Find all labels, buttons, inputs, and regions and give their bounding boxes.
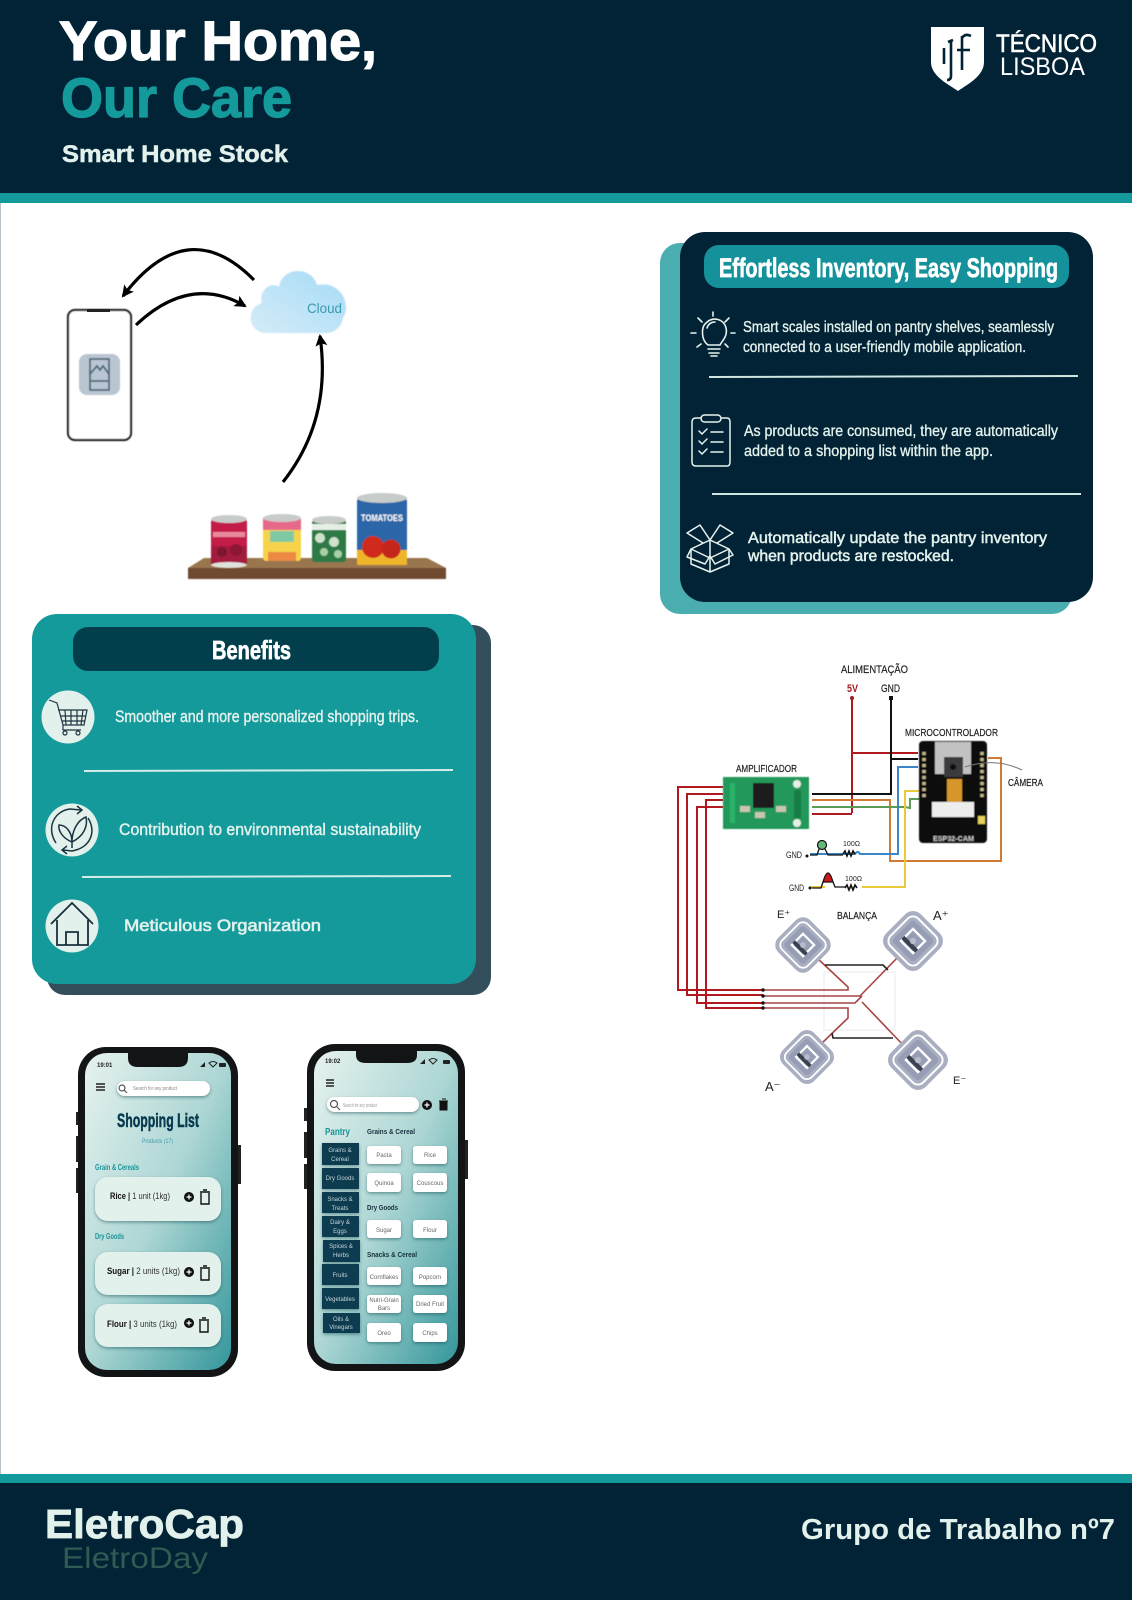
phone mockup: pantry bbox=[304, 1044, 468, 1371]
category menu: Vinegars bbox=[329, 1325, 353, 1331]
category menu: Snacks & bbox=[327, 1197, 353, 1203]
product buttons: Cornflakes bbox=[370, 1275, 398, 1281]
menu icon bbox=[326, 1080, 334, 1086]
heading: shopping list: Shopping List bbox=[117, 1111, 199, 1132]
scale labels: E⁺ bbox=[777, 909, 790, 921]
label: amplificador: AMPLIFICADOR bbox=[736, 764, 797, 775]
category menu: Eggs bbox=[333, 1229, 347, 1235]
label: camera: CÂMERA bbox=[1008, 776, 1043, 789]
label: GND supply: GND bbox=[881, 683, 900, 695]
category menu: Dairy & bbox=[330, 1220, 350, 1226]
title: Our Care bbox=[61, 66, 292, 129]
label: 5V: 5V bbox=[847, 683, 859, 695]
scale labels: A⁺ bbox=[933, 908, 949, 923]
card: sugar: Sugar | 2 units (1kg) bbox=[107, 1266, 180, 1277]
logo: Tecnico Lisboa: TÉCNICO bbox=[996, 29, 1097, 58]
section: grains and cereal: Grains & Cereal bbox=[367, 1129, 415, 1136]
product buttons bbox=[367, 1146, 447, 1342]
phone mockup: shopping list bbox=[76, 1047, 241, 1377]
product buttons: Sugar bbox=[376, 1228, 392, 1234]
product buttons: Pasta bbox=[376, 1153, 392, 1159]
icon: can of fruit bbox=[263, 514, 301, 561]
product buttons: Popcorn bbox=[419, 1275, 441, 1281]
arrow: shelf to cloud bbox=[283, 336, 322, 482]
text: products consumed bbox=[744, 423, 1058, 460]
card: rice bbox=[95, 1177, 221, 1221]
text: automatically update: when products are restocked. bbox=[747, 548, 954, 565]
product buttons: Quinoa bbox=[374, 1181, 394, 1187]
text: environmental sustainability: Contribution to environmental sustainability bbox=[119, 820, 421, 839]
category menu: Treats bbox=[332, 1206, 348, 1212]
icon: open box bbox=[687, 525, 733, 572]
scale labels: A⁻ bbox=[765, 1079, 781, 1094]
subtitle: Smart Home Stock bbox=[62, 141, 289, 168]
footer band bbox=[0, 1474, 1132, 1600]
status bar bbox=[97, 1062, 226, 1069]
product buttons: Dried Fruit bbox=[416, 1302, 444, 1308]
logo: Tecnico Lisboa bbox=[931, 27, 1097, 91]
system diagram: phone, cloud and pantry shelf bbox=[68, 250, 446, 579]
icon: can of tomatoes bbox=[357, 493, 407, 565]
icon: can of raspberries bbox=[211, 515, 247, 568]
load cell: E+ bbox=[771, 913, 835, 977]
category menu: Dry Goods bbox=[326, 1176, 354, 1182]
footer: working group: Grupo de Trabalho nº7 bbox=[801, 1514, 1115, 1546]
load cell: A+ bbox=[878, 906, 948, 976]
side buttons bbox=[304, 1108, 468, 1189]
search box: Search for any product bbox=[133, 1086, 178, 1092]
text: products consumed: As products are consumed, they are automatically bbox=[744, 423, 1058, 440]
section: snacks and cereal: Snacks & Cereal bbox=[367, 1252, 417, 1259]
card: rice: Rice | 1 unit (1kg) bbox=[110, 1191, 170, 1202]
green LED with resistor bbox=[786, 840, 860, 860]
icon: cloud bbox=[251, 271, 346, 333]
category menu: Vegetables bbox=[325, 1297, 355, 1303]
product buttons: Flour bbox=[423, 1228, 437, 1234]
side buttons bbox=[76, 1112, 241, 1193]
icon: recycle leaf bbox=[46, 804, 98, 856]
heading: benefits: Benefits bbox=[212, 635, 291, 665]
card: flour bbox=[95, 1304, 221, 1347]
footer logo: EletroCap EletroDay: EletroCap bbox=[45, 1501, 244, 1547]
product buttons: Rice bbox=[424, 1153, 437, 1159]
footer logo: EletroCap EletroDay: EletroDay bbox=[62, 1542, 208, 1575]
amplifier board bbox=[723, 777, 809, 829]
red LED with resistor bbox=[789, 873, 862, 893]
text: automatically update: Automatically update the pantry inventory bbox=[748, 530, 1047, 547]
scale labels: BALANÇA bbox=[837, 911, 877, 922]
product buttons: Bars bbox=[378, 1306, 390, 1312]
category menu: Grains & bbox=[328, 1148, 352, 1154]
scale wiring bbox=[763, 955, 905, 1047]
title: Your Home, bbox=[59, 9, 377, 72]
icon: shopping cart bbox=[42, 690, 94, 744]
heading: benefits bbox=[73, 627, 439, 671]
text: smart scales bbox=[743, 319, 1054, 356]
text: smoother shopping: Smoother and more personalized shopping trips. bbox=[115, 707, 419, 726]
category menu: Fruits bbox=[332, 1273, 348, 1279]
search box with add and delete bbox=[327, 1097, 448, 1112]
category menu: Oils & bbox=[333, 1317, 349, 1323]
status bar bbox=[325, 1058, 450, 1065]
icon: house bbox=[46, 900, 98, 952]
category: dry goods: Dry Goods bbox=[95, 1232, 124, 1241]
product buttons: Oreo bbox=[377, 1331, 391, 1337]
label: 5V bbox=[847, 683, 859, 700]
section: dry goods: Dry Goods bbox=[367, 1205, 398, 1212]
search box with add and delete: Search for any product bbox=[343, 1103, 377, 1109]
product buttons: Chips bbox=[422, 1331, 438, 1337]
product buttons: Couscous bbox=[417, 1181, 443, 1187]
heading: effortless inventory bbox=[704, 245, 1069, 288]
icon: wooden shelf bbox=[188, 558, 446, 579]
icon: light bulb bbox=[691, 312, 735, 356]
category menu: Spices & bbox=[329, 1244, 353, 1250]
arrow: phone to cloud bbox=[136, 294, 245, 325]
green LED with resistor: 100Ω bbox=[843, 841, 860, 848]
title bbox=[59, 9, 377, 129]
icon: checklist clipboard bbox=[692, 415, 730, 466]
label: alimentacao: ALIMENTAÇÃO bbox=[841, 663, 908, 676]
footer logo: EletroCap EletroDay bbox=[45, 1501, 244, 1575]
camera leader line bbox=[965, 763, 1022, 770]
category: grain and cereals: Grain & Cereals bbox=[95, 1163, 139, 1172]
text: meticulous organization: Meticulous Organization bbox=[124, 916, 321, 935]
connection dots bbox=[761, 988, 765, 1010]
panel: benefits bbox=[32, 614, 491, 995]
red LED with resistor: GND bbox=[789, 883, 804, 893]
load cell: A- bbox=[776, 1026, 838, 1088]
arrow: cloud to phone bbox=[123, 250, 254, 296]
wires: power and signals bbox=[678, 698, 1001, 1008]
product buttons: Nutri-Grain bbox=[369, 1298, 399, 1304]
panel: effortless inventory bbox=[660, 232, 1093, 614]
text: smart scales: Smart scales installed on pantry shelves, seamlessly bbox=[743, 319, 1054, 336]
green LED with resistor: GND bbox=[786, 850, 802, 860]
red LED with resistor: 100Ω bbox=[845, 876, 862, 883]
ESP32-CAM board: ESP32-CAM bbox=[933, 836, 974, 843]
status bar: 19:02 bbox=[325, 1059, 341, 1065]
load cell: E- bbox=[883, 1025, 953, 1095]
ESP32-CAM board bbox=[919, 741, 987, 843]
label: microcontrolador: MICROCONTROLADOR bbox=[905, 728, 998, 739]
products count: Products (17) bbox=[142, 1138, 173, 1145]
category menu: Herbs bbox=[333, 1253, 349, 1259]
search box bbox=[117, 1081, 210, 1096]
label: GND supply bbox=[881, 683, 900, 700]
text: products consumed: added to a shopping list within the app. bbox=[744, 443, 993, 460]
logo: Tecnico Lisboa: LISBOA bbox=[1000, 53, 1085, 81]
category menu bbox=[322, 1143, 360, 1333]
icon: can of tomatoes: TOMATOES bbox=[361, 513, 403, 523]
menu icon bbox=[96, 1084, 105, 1090]
icon: smartphone with app bbox=[68, 309, 131, 440]
scale labels bbox=[765, 908, 966, 1094]
category menu: Cereal bbox=[331, 1157, 349, 1163]
status bar: 19:01 bbox=[97, 1063, 113, 1069]
scale labels: E⁻ bbox=[953, 1075, 966, 1087]
icon: can of peas bbox=[312, 516, 346, 562]
icon: cloud: Cloud bbox=[307, 300, 342, 316]
card: flour: Flour | 3 units (1kg) bbox=[107, 1319, 177, 1330]
circuit diagram bbox=[678, 663, 1043, 1095]
text: automatically update bbox=[747, 530, 1047, 565]
heading: pantry: Pantry bbox=[325, 1127, 350, 1138]
text: smart scales: connected to a user-friendly mobile application. bbox=[743, 339, 1026, 356]
card: sugar bbox=[95, 1252, 221, 1295]
